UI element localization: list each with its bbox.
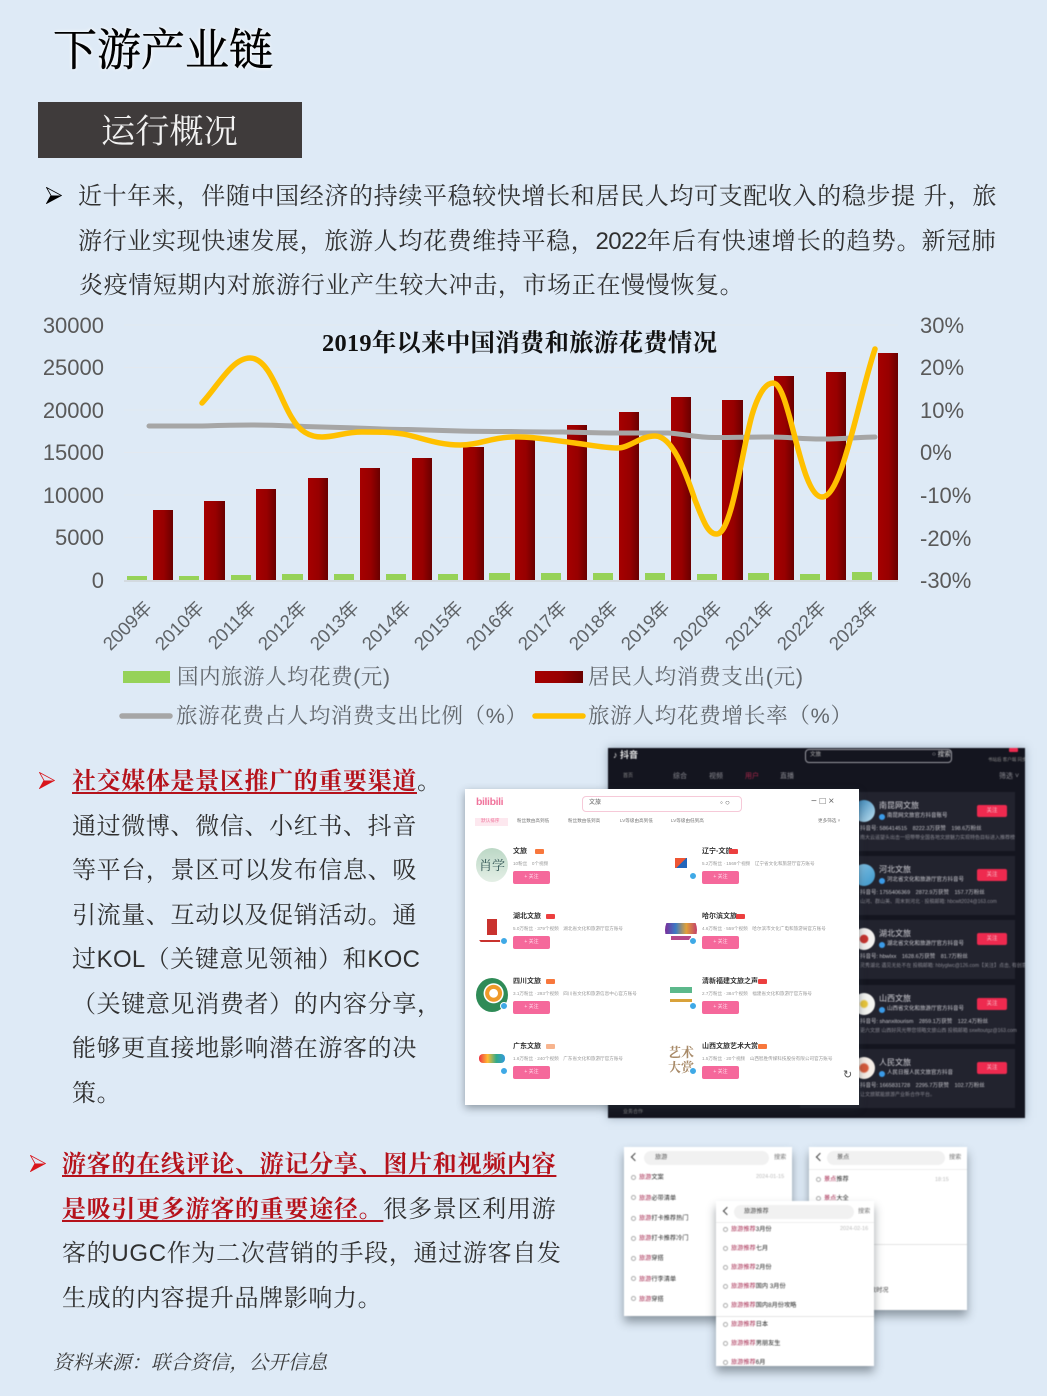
x axis year labels: 2011年 <box>204 597 260 653</box>
screenshot: bilibili search results: LV等级由高到低 <box>620 818 653 823</box>
screenshot: bilibili search results: + 关注 <box>524 874 539 880</box>
screenshot: douyin search results: 湖北省文化和旅游厅官方抖音号 <box>887 941 964 947</box>
x axis year labels: 2020年 <box>669 597 726 654</box>
right axis labels: -10% <box>920 483 971 508</box>
screenshot: bilibili search results: bilibili <box>476 796 503 808</box>
screenshot: search suggestions front: 旅游推荐男朋友生 <box>731 1340 780 1347</box>
screenshot: douyin search results: 南大云遥望头出击一招带带全国各地文旅魅力实现特色目标进入推荐榜 <box>860 835 1015 841</box>
screenshot: search suggestions front: 旅游推荐七月 <box>731 1245 768 1252</box>
screenshot: bilibili search results: 四川文旅 <box>513 978 541 985</box>
screenshot: search suggestions left: 旅游 <box>655 1154 667 1161</box>
screenshot: douyin search results: 直播 <box>780 773 794 780</box>
screenshot: bilibili search results: 2.7万粉丝 · 384个视频 福建省文化和旅游厅官方账号 <box>702 991 812 996</box>
screenshot: search suggestions left: 旅游打卡推荐冷门 <box>639 1235 688 1242</box>
screenshot: bilibili search results: + 关注 <box>524 939 539 945</box>
screenshot: search suggestions right: 景点 <box>837 1154 849 1161</box>
left axis labels: 30000 <box>43 313 104 338</box>
screenshot: douyin search results: 更六文旅 山西好风光带您领略文旅山西 投稿邮箱 sxwltoutgz@163.com <box>860 1028 1017 1034</box>
screenshot: douyin search results: 抖音号: hbwlxx 1628.6万获赞 81.7万粉丝 <box>860 954 968 960</box>
left axis labels: 10000 <box>43 483 104 508</box>
icon: red bullet arrow <box>39 772 55 789</box>
text block: social media channel: 策。 <box>72 1080 121 1107</box>
banner heading: 运行概况 <box>101 114 238 151</box>
left axis labels: 20000 <box>43 398 104 423</box>
screenshot: bilibili search results: 3.1万粉丝 · 293个视频 四川省文化和旅游信息中心官方账号 <box>513 991 637 996</box>
screenshot: douyin search results: 关注 <box>986 936 998 942</box>
right axis labels: -20% <box>920 526 971 551</box>
screenshot: douyin search results: 山西省文化和旅游厅官方抖音号 <box>887 1006 964 1012</box>
screenshot: bilibili search results: 1.6万粉丝 · 240个视频 广东省文化和旅游厅官方账号 <box>513 1056 623 1061</box>
screenshot: search suggestions right: 景点推荐人数时况 <box>839 1287 888 1294</box>
x axis year labels: 2017年 <box>514 597 571 654</box>
left axis labels: 15000 <box>43 440 104 465</box>
x axis year labels: 2016年 <box>462 597 519 654</box>
screenshot: search suggestions left: 旅游穿搭 <box>639 1255 664 1262</box>
text block: user generated content: 游客的在线评论、游记分享、图片和视频内容 <box>62 1151 556 1178</box>
screenshot: bilibili search results: + 关注 <box>713 939 728 945</box>
screenshot: bilibili search results: 1.5万粉丝 · 20个视频 山西智胜传媒科技股份有限公司官方账号 <box>702 1056 832 1061</box>
screenshot: bilibili search results: + 关注 <box>713 874 728 880</box>
x axis year labels: 2009年 <box>99 597 156 654</box>
legend: 旅游花费占人均消费支出比例（%） <box>176 704 527 728</box>
screenshot: douyin search results: 视频 <box>709 773 723 780</box>
right axis labels: 0% <box>920 440 952 465</box>
screenshot: search suggestions right: 18:15 <box>935 1177 949 1183</box>
screenshot: search suggestions front: 旅游推荐6月 <box>731 1359 765 1366</box>
screenshot: search suggestions front: 旅游推荐国内 3月份 <box>731 1283 786 1290</box>
screenshot: bilibili search results: 更多筛选 ˅ <box>818 818 840 823</box>
screenshot: search suggestions front: 2024-02-16 <box>840 1226 868 1232</box>
screenshot: search suggestions right: 景点大全 <box>824 1195 849 1202</box>
screenshot: search suggestions front: 旅游推荐国内8月份攻略 <box>731 1302 796 1309</box>
screenshot: bilibili search results <box>465 789 859 1105</box>
screenshot: search suggestions front: 旅游推荐 <box>744 1208 769 1215</box>
bars: resident consumption per capita <box>153 353 898 580</box>
combo chart: consumption and tourism spending <box>43 313 971 728</box>
x axis year labels: 2012年 <box>254 597 311 654</box>
screenshot: bilibili search results: + 关注 <box>524 1004 539 1010</box>
screenshot: douyin search results: 抖音号: 1665831728 2295.7万获赞 102.7万粉丝 <box>860 1083 985 1089</box>
x axis year labels: 2023年 <box>825 597 882 654</box>
screenshot: search suggestions front: 搜索 <box>858 1208 870 1215</box>
screenshot: bilibili search results: LV等级由低到高 <box>671 818 704 823</box>
screenshot: bilibili search results: 5.0万粉丝 · 379个视频 湖北省文化和旅游厅官方账号 <box>513 926 623 931</box>
screenshot: search suggestions left <box>624 1147 792 1316</box>
screenshot: bilibili search results: 清新福建文旅之声 <box>702 978 758 985</box>
screenshot: bilibili search results: 5.2万粉丝 · 1569个视频 辽宁省文化和旅游厅官方账号 <box>702 861 815 866</box>
screenshot: bilibili search results: 肖学 <box>479 855 505 874</box>
screenshot: search suggestions left: 搜索 <box>774 1154 786 1161</box>
text block: social media channel: （关键意见消费者）的内容分享， <box>72 991 442 1018</box>
screenshot: douyin search results: 山河、群山美、周末到河北 · 投稿邮箱: hbcwlt2024@163.com <box>860 899 997 905</box>
screenshot: bilibili search results: 文旅 <box>589 800 601 806</box>
screenshot: bilibili search results: 10粉丝 0个视频 <box>513 861 548 866</box>
screenshot: douyin search results: 用户 <box>745 773 759 780</box>
screenshot: search suggestions left: 旅游打卡推荐热门 <box>639 1215 688 1222</box>
screenshot: search suggestions left: 旅游文案 <box>639 1174 664 1181</box>
legend: 旅游人均花费增长率（%） <box>588 704 852 728</box>
screenshot: search suggestions right <box>809 1147 967 1310</box>
left axis labels: 0 <box>92 568 104 593</box>
screenshot: douyin search results: 山西文旅 <box>879 994 911 1003</box>
left axis labels <box>43 313 104 593</box>
icon: bullet arrow <box>46 187 62 204</box>
left axis labels: 25000 <box>43 355 104 380</box>
text block: user generated content: 生成的内容提升品牌影响力。 <box>62 1285 382 1312</box>
icon: red bullet arrow <box>30 1155 46 1172</box>
screenshot: search suggestions left: 旅游行李清单 <box>639 1276 676 1283</box>
screenshot: douyin search results: 南昆网文旅 <box>879 801 919 810</box>
screenshot: douyin search results: 筛选 ˅ <box>999 773 1019 780</box>
screenshot: douyin search results: 首页 <box>623 773 633 779</box>
x axis year labels: 2013年 <box>306 597 363 654</box>
screenshot: douyin search results: 南昆网文旅官方抖音账号 <box>887 813 948 819</box>
screenshot: douyin search results: 关注 <box>986 808 998 814</box>
text block: social media channel: 引流量、互动以及促销活动。通 <box>72 902 417 929</box>
screenshot: douyin search results: 抖音号: shanxitourism 2859.1万获赞 122.4万粉丝 <box>860 1019 988 1025</box>
screenshot: douyin search results: 关注 <box>986 1001 998 1007</box>
x axis year labels: 2018年 <box>565 597 622 654</box>
screenshot: douyin search results: 湖北文旅 <box>879 929 911 938</box>
text block: user generated content: 是吸引更多游客的重要途径。很多景区利用游 <box>62 1196 556 1223</box>
screenshot: douyin search results: 业务合作 <box>623 1109 643 1115</box>
section banner <box>38 102 302 158</box>
screenshot: douyin search results: 让文旅赋能旅游产业新合作平台。 <box>860 1092 935 1098</box>
screenshot: bilibili search results: 粉丝数由高到低 <box>517 818 549 823</box>
intro paragraph <box>78 183 997 299</box>
right axis labels: 10% <box>920 398 964 423</box>
text block: social media channel: 过KOL（关键意见领袖）和KOC <box>72 946 420 973</box>
screenshot: bilibili search results: − □ × <box>811 796 834 807</box>
text block: social media channel: 等平台，景区可以发布信息、吸 <box>72 857 417 884</box>
text block: social media channel <box>72 768 442 1107</box>
left axis labels: 5000 <box>55 525 104 550</box>
x axis year labels: 2014年 <box>358 597 415 654</box>
text block: user generated content <box>62 1151 562 1312</box>
screenshot: bilibili search results: 湖北文旅 <box>513 913 541 920</box>
x axis year labels: 2022年 <box>773 597 830 654</box>
screenshot: douyin search results: 河北文旅 <box>879 865 911 874</box>
text block: user generated content: 客的UGC作为二次营销的手段，通过游客自发 <box>62 1240 562 1267</box>
screenshot: douyin search results: 河北省文化和旅游厅官方抖音号 <box>887 877 964 883</box>
title: 下游产业链 <box>53 26 273 75</box>
screenshot: bilibili search results: ◦ ○ <box>720 798 730 807</box>
right axis labels: 30% <box>920 313 964 338</box>
screenshot: bilibili search results: + 关注 <box>524 1069 539 1075</box>
bars: domestic tourism spend per capita <box>127 572 872 580</box>
screenshot: douyin search results: ○ 搜索 <box>932 751 951 758</box>
screenshot: bilibili search results: 4.6万粉丝 · 559个视频 哈尔滨市文化广电和旅游局官方账号 <box>702 926 826 931</box>
screenshot: douyin search results: ♪ 抖音 <box>613 750 638 760</box>
text block: social media channel: 能够更直接地影响潜在游客的决 <box>72 1035 417 1062</box>
text block: social media channel: 通过微博、微信、小红书、抖音 <box>72 813 417 840</box>
screenshot: bilibili search results: 文旅 <box>513 848 527 855</box>
screenshot: bilibili search results: 广东文旅 <box>513 1043 541 1050</box>
legend <box>122 665 852 728</box>
screenshot: bilibili search results: 粉丝数由低到高 <box>568 818 600 823</box>
legend: 居民人均消费支出(元) <box>588 665 803 689</box>
screenshot: search suggestions left: 旅游穿搭 <box>639 1296 664 1303</box>
screenshot: search suggestions front: 旅游推荐3月份 <box>731 1226 772 1233</box>
x axis year labels: 2010年 <box>151 597 208 654</box>
text block: social media channel: 社交媒体是景区推广的重要渠道。 <box>72 768 442 795</box>
screenshot: search suggestions right: 景点推荐 <box>824 1176 849 1183</box>
x axis year labels: 2021年 <box>721 597 778 654</box>
screenshot: bilibili search results: + 关注 <box>713 1069 728 1075</box>
screenshot: search suggestions front: 旅游推荐日本 <box>731 1321 768 1328</box>
chart title: 2019年以来中国消费和旅游花费情况 <box>322 329 717 357</box>
legend: 国内旅游人均花费(元) <box>177 665 390 689</box>
screenshot: douyin search results: 抖音号: 1755406369 2872.9万获赞 157.7万粉丝 <box>860 890 985 896</box>
screenshot: bilibili search results: 大赏 <box>668 1057 694 1076</box>
screenshot: bilibili search results: + 关注 <box>713 1004 728 1010</box>
screenshot: bilibili search results: ↻ <box>843 1069 852 1081</box>
screenshot: douyin search results: 人民文旅 <box>879 1058 911 1067</box>
screenshot: search suggestions front: 旅游推荐2月份 <box>731 1264 772 1271</box>
source note: 资料来源：联合资信，公开信息 <box>53 1353 327 1374</box>
x axis year labels <box>99 597 882 654</box>
screenshot: bilibili search results: 默认排序 <box>481 818 499 823</box>
screenshot: search suggestions right: 搜索 <box>949 1154 961 1161</box>
right axis labels <box>920 313 971 593</box>
x axis year labels: 2019年 <box>617 597 674 654</box>
screenshot: douyin search results: 综合 <box>673 773 687 780</box>
right axis labels: 20% <box>920 355 964 380</box>
screenshot: douyin search results: 人民日报人民文旅官方抖音 <box>887 1070 953 1076</box>
right axis labels: -30% <box>920 568 971 593</box>
screenshot: douyin search results: 文旅 <box>810 752 821 758</box>
line: tourism spend growth rate <box>202 349 875 534</box>
x axis year labels: 2015年 <box>410 597 467 654</box>
screenshot: bilibili search results: 山西文旅艺术大赏 <box>702 1043 758 1050</box>
intro paragraph: 炎疫情短期内对旅游行业产生较大冲击，市场正在慢慢恢复。 <box>79 272 744 299</box>
screenshot: bilibili search results: 辽宁-文旅 <box>702 848 732 855</box>
screenshot: bilibili search results: 哈尔滨文旅 <box>702 913 737 920</box>
intro paragraph: 游行业实现快速发展，旅游人均花费维持平稳，2022年后有快速增长的趋势。新冠肺 <box>78 228 997 255</box>
line: tourism share of consumption <box>149 425 875 439</box>
screenshot: douyin search results: 抖音号: 586414515 8222.3万获赞 198.6万粉丝 <box>860 826 982 832</box>
screenshot: search suggestions left: 旅游必带清单 <box>639 1195 676 1202</box>
screenshot: douyin search results <box>608 748 1025 1118</box>
screenshot: douyin search results: 关注 <box>986 1065 998 1071</box>
screenshot: search suggestions front <box>716 1201 874 1366</box>
intro paragraph: 近十年来，伴随中国经济的持续平稳较快增长和居民人均可支配收入的稳步提 升，旅 <box>78 183 997 210</box>
screenshot: douyin search results: 关注 <box>986 872 998 878</box>
screenshot: search suggestions left: 2024-01-15 <box>756 1174 784 1180</box>
